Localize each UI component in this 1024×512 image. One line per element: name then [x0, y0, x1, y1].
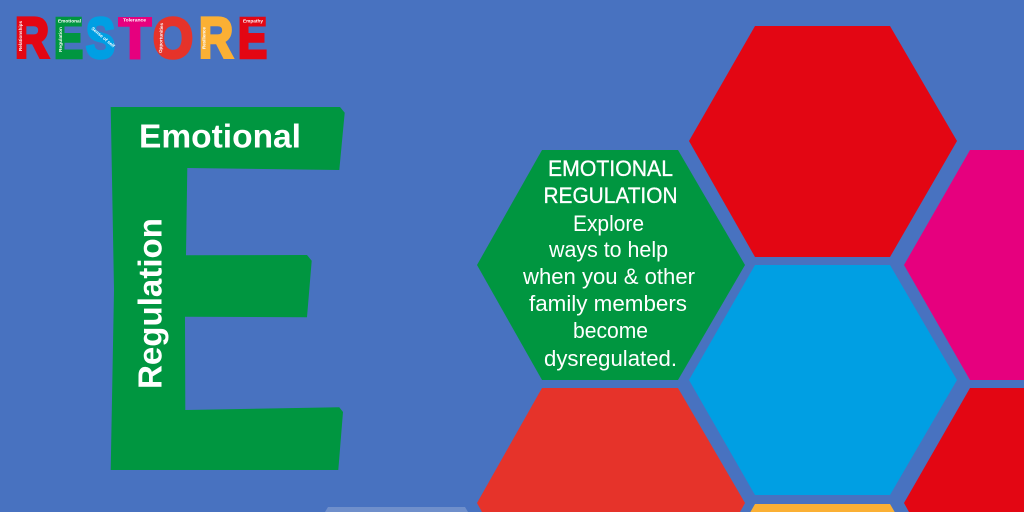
- hexagon heading: [544, 156, 678, 208]
- logo letter T: Tolerance: T: [119, 6, 151, 70]
- logo letter S: Sense of self: Sense of self: [90, 26, 116, 49]
- hexagon: lower red-orange: [477, 388, 745, 512]
- logo letter R: Relationships: R: [15, 6, 49, 70]
- hexagon heading: REGULATION: [544, 183, 678, 208]
- hexagon: orange: [750, 504, 895, 512]
- logo letter O: Opportunities: O: [153, 6, 193, 70]
- word: Regulation: Regulation: [132, 218, 169, 389]
- hexagon body text: become: [573, 318, 648, 343]
- hexagon body text: dysregulated.: [544, 346, 677, 371]
- logo letter T: Tolerance: Tolerance: [123, 18, 146, 23]
- logo letter E: Emotional Regulation: Regulation: [58, 27, 63, 52]
- hexagon: blue: [689, 265, 957, 495]
- green hexagon: [477, 150, 745, 380]
- hexagon body text: family members: [529, 291, 687, 316]
- hexagon body text: Explore: [573, 211, 644, 236]
- logo letter E: Emotional Regulation: E: [54, 6, 83, 70]
- logo letter E: Empathy: E: [238, 6, 267, 70]
- logo letter S: Sense of self: S: [86, 6, 115, 70]
- hexagon: faint lower: [325, 507, 468, 512]
- hexagon panel: emotional regulation: [477, 150, 745, 380]
- hexagon body text: ways to help: [548, 237, 668, 262]
- hexagon: lower right red: [904, 388, 1024, 512]
- letter E shape: [111, 107, 345, 470]
- large letter E with title: [111, 107, 345, 470]
- hexagon: top red: [689, 26, 957, 257]
- hexagon heading: EMOTIONAL: [548, 156, 673, 181]
- logo letter E: Empathy: Empathy: [243, 19, 263, 24]
- logo letter R: Resilience: Resilience: [202, 27, 206, 49]
- logo letter R: Resilience: R: [199, 6, 233, 70]
- hexagon: magenta: [904, 150, 1024, 380]
- logo letter R: Relationships: Relationships: [18, 21, 23, 51]
- word: Emotional: Emotional: [139, 118, 301, 154]
- hexagon body text: when you & other: [522, 264, 695, 289]
- RESTORE logo: [15, 6, 267, 70]
- logo letter E: Emotional Regulation: Emotional: [58, 18, 81, 23]
- hexagon body text: [522, 211, 695, 371]
- logo letter O: Opportunities: Opportunities: [158, 22, 164, 53]
